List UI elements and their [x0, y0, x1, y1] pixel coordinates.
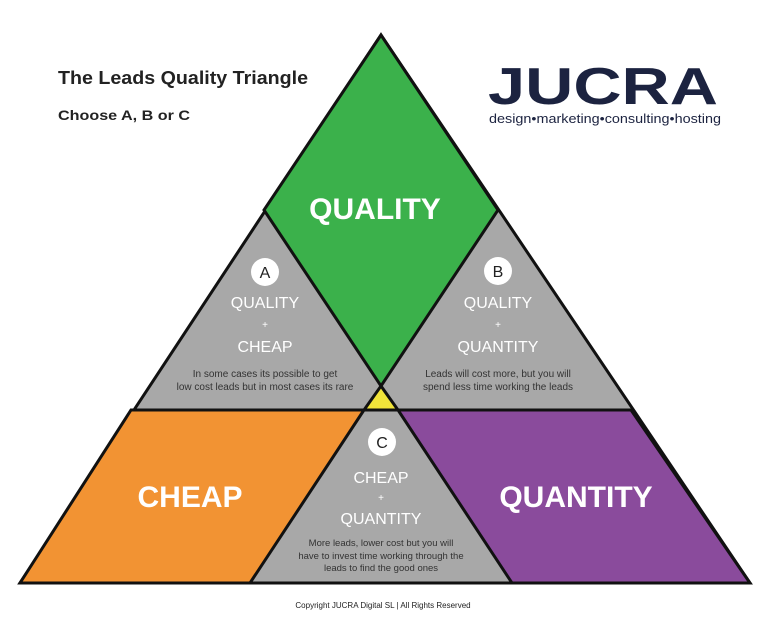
option C: CHEAP: [353, 470, 409, 487]
title: The Leads Quality Triangle: [58, 68, 308, 88]
subtitle: Choose A, B or C: [58, 107, 190, 123]
option A: [177, 258, 354, 393]
option B: [423, 257, 573, 393]
panel: quality: [264, 35, 498, 386]
option A: QUALITY: [231, 295, 300, 312]
footer: Copyright JUCRA Digital SL | All Rights Reserved: [295, 601, 471, 610]
option C: QUANTITY: [341, 511, 422, 528]
label: QUALITY: QUALITY: [309, 193, 441, 226]
option B: +: [495, 320, 501, 331]
panel: quantity: [398, 410, 750, 583]
option B: Leads will cost more, but you will: [425, 369, 571, 380]
option B: QUANTITY: [458, 339, 539, 356]
logo: design•marketing•consulting•hosting: [489, 111, 721, 126]
option A: A: [260, 265, 271, 282]
logo: [488, 58, 721, 126]
option C: have to invest time working through the: [298, 551, 464, 562]
option C: [298, 428, 464, 574]
label: CHEAP: CHEAP: [137, 481, 243, 514]
panel: yellow center: [364, 386, 398, 410]
option A: In some cases its possible to get: [193, 369, 337, 380]
logo: JUCRA: [488, 58, 718, 116]
option C: More leads, lower cost but you will: [309, 538, 453, 549]
option B: QUALITY: [464, 295, 533, 312]
option B: spend less time working the leads: [423, 382, 573, 393]
panel: cheap: [20, 410, 364, 583]
option C: leads to find the good ones: [324, 563, 438, 574]
option A: low cost leads but in most cases its rare: [177, 382, 354, 393]
option B: B: [493, 264, 503, 281]
label: QUANTITY: QUANTITY: [499, 481, 653, 514]
option C: +: [378, 493, 384, 504]
option A: CHEAP: [237, 339, 293, 356]
option A: +: [262, 320, 268, 331]
option C: C: [376, 435, 388, 452]
